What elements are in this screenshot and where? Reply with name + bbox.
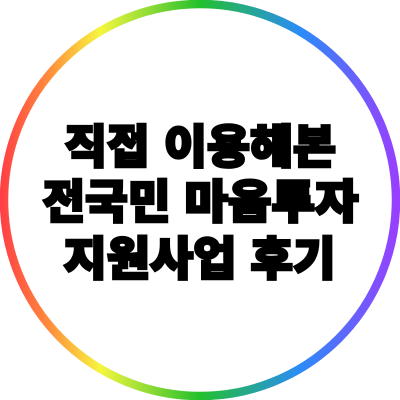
title line 2 [42,176,358,228]
title line 2: 마음투자 [184,176,358,228]
title line 3: 지원사업 [64,233,236,285]
title line 1: 이용해본 [164,121,336,173]
title line 1 [64,121,336,173]
title [42,121,358,285]
title line 3: 후기 [250,233,336,285]
title line 1: 직접 [64,121,150,173]
title line 3 [64,233,336,285]
title line 2: 전국민 [42,176,170,228]
